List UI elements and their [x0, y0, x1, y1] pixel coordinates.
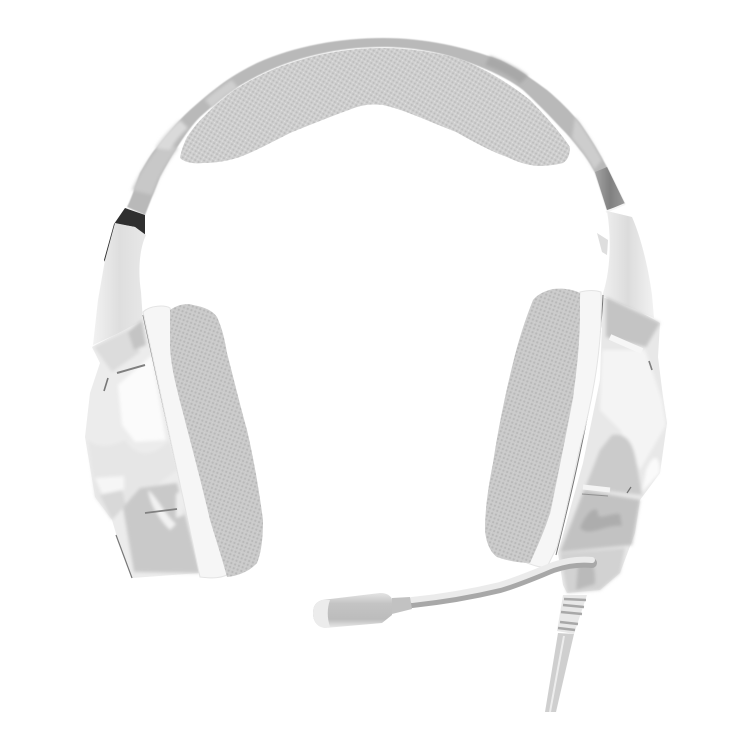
left white ring	[143, 306, 227, 578]
right metal slider	[595, 167, 625, 210]
braided cable	[545, 633, 574, 712]
right arm small tab	[597, 233, 608, 255]
right cup shell	[558, 297, 667, 593]
headband arc	[127, 38, 625, 215]
right earcup	[556, 295, 667, 593]
left bottom tab	[116, 535, 132, 578]
headband	[104, 38, 625, 262]
mic capsule	[313, 593, 392, 628]
left arm	[93, 223, 146, 345]
mic capsule tip	[313, 600, 330, 628]
right cup seam	[556, 295, 603, 555]
right cup vents	[610, 337, 642, 351]
left cup shell	[85, 320, 200, 578]
left ear cushion	[170, 304, 263, 577]
strain relief	[557, 595, 587, 634]
left earcup	[85, 315, 200, 578]
left black joint	[104, 208, 145, 262]
right cup camo patches	[560, 297, 666, 593]
left cup vents	[117, 365, 145, 373]
right ear cushion	[485, 289, 580, 563]
left cup camo patches	[88, 320, 200, 573]
cable	[545, 595, 587, 712]
headband light camo patches	[132, 56, 602, 195]
cable braid highlight	[550, 636, 564, 712]
right slider clip	[606, 204, 625, 212]
right white ring	[527, 290, 601, 567]
left cup seam	[143, 315, 200, 573]
headband pad	[180, 48, 570, 166]
right arm	[602, 211, 654, 318]
boom collar	[392, 597, 412, 614]
microphone boom	[313, 560, 592, 628]
boom arm	[412, 563, 592, 603]
